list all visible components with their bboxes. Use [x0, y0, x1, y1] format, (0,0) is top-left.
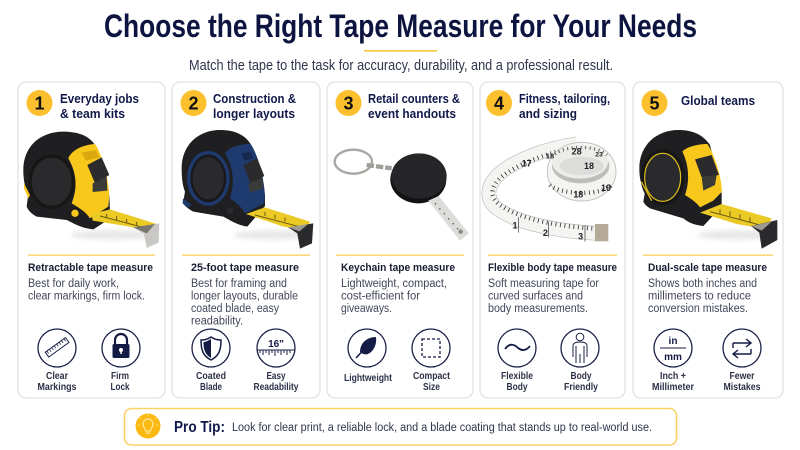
step badge 3 — [336, 90, 362, 116]
pro tip text: Look for clear print, a reliable lock, and a blade coating that stands up to real-world use. — [232, 422, 652, 434]
icon: retractable tape measure — [23, 132, 159, 248]
type name: Flexible body tape measure — [488, 262, 617, 274]
label — [254, 371, 299, 393]
heading: longer layouts — [213, 106, 295, 121]
icon: fewer mistakes arrows — [723, 329, 761, 367]
label — [501, 371, 533, 393]
icon: inch and millimeter: in — [669, 336, 677, 347]
label: Size — [423, 382, 440, 393]
heading: & team kits — [60, 106, 125, 121]
label — [652, 371, 694, 393]
label: Easy — [266, 371, 286, 382]
heading: event handouts — [368, 106, 456, 121]
label — [38, 371, 77, 393]
type name: 25-foot tape measure — [191, 262, 299, 274]
description: Lightweight, compact, — [341, 278, 447, 290]
label: Coated — [196, 371, 226, 382]
icon: flexible body tape: 1 — [512, 221, 517, 231]
subtitle: Match the tape to the task for accuracy, durability, and a professional result. — [189, 58, 613, 74]
description: readability. — [191, 316, 243, 328]
pro tip label: Pro Tip: — [174, 419, 225, 436]
label — [724, 371, 761, 393]
label: Lock — [110, 382, 130, 393]
heading: Everyday jobs — [60, 91, 139, 106]
icon: 25-foot tape measure — [182, 130, 313, 249]
label — [196, 371, 226, 393]
icon: flexible body tape: 19 — [601, 183, 611, 193]
description: millimeters to reduce — [648, 290, 751, 302]
description: Soft measuring tape for — [488, 278, 599, 290]
icon: inch and millimeter — [654, 329, 692, 367]
label: Compact — [413, 371, 451, 382]
heading — [519, 91, 610, 121]
label: Lightweight — [344, 373, 393, 384]
label — [413, 371, 451, 393]
description: Shows both inches and — [648, 278, 757, 290]
icon: flexible body tape: 28 — [572, 147, 582, 157]
label: Readability — [254, 382, 299, 393]
step badge 1 — [26, 90, 52, 116]
step badge 4 — [486, 90, 512, 116]
icon: coated blade — [192, 329, 230, 367]
icon: flexible body tape: 2 — [543, 228, 548, 238]
heading: Retail counters & — [368, 91, 460, 106]
icon: flexible body tape — [489, 142, 616, 242]
step badge 3: 3 — [343, 94, 354, 114]
icon: body friendly person — [561, 329, 599, 367]
label: Body — [570, 371, 592, 382]
icon: light bulb — [136, 414, 160, 438]
heading: Global teams — [681, 93, 755, 108]
panel: retail counters — [327, 82, 473, 398]
icon: flexible body tape: 18 — [546, 152, 554, 161]
panel: global teams — [633, 82, 783, 398]
label: Mistakes — [724, 382, 761, 393]
panel: fitness tailoring — [480, 82, 625, 398]
description — [488, 278, 599, 315]
heading: Construction & — [213, 91, 296, 106]
description: cost-efficient for — [341, 290, 420, 302]
icon: compact size — [412, 329, 450, 367]
icon: easy readability — [257, 329, 295, 367]
panel: construction — [172, 82, 320, 398]
step badge 2 — [180, 90, 206, 116]
description: Best for framing and — [191, 278, 287, 290]
icon: flexible body tape: 3 — [578, 231, 583, 241]
label: Fewer — [730, 371, 755, 382]
icon: easy readability: 16" — [268, 339, 284, 350]
icon: lightweight feather — [348, 329, 386, 367]
icon: firm lock — [102, 329, 140, 367]
icon: flexible body wave — [498, 329, 536, 367]
label: Flexible — [501, 371, 533, 382]
heading — [60, 91, 139, 121]
description — [191, 278, 298, 328]
icon: dual-scale tape measure — [639, 130, 777, 249]
heading: and sizing — [519, 106, 577, 121]
description: coated blade, easy — [191, 303, 279, 315]
label: Blade — [200, 382, 222, 393]
icon: clear markings — [38, 329, 76, 367]
label — [564, 371, 598, 393]
icon: flexible body tape: 17 — [522, 159, 532, 169]
step badge 2: 2 — [188, 94, 199, 114]
heading — [213, 91, 296, 121]
label — [110, 371, 130, 393]
callout: pro tip — [124, 408, 676, 445]
icon: flexible body tape: 18 — [573, 190, 583, 200]
label: Markings — [38, 382, 77, 393]
label: Millimeter — [652, 382, 694, 393]
description: Best for daily work, — [28, 278, 119, 290]
step badge 1: 1 — [34, 94, 45, 114]
label: Clear — [46, 371, 68, 382]
icon: inch and millimeter: mm — [664, 352, 682, 363]
description — [648, 278, 757, 315]
heading — [368, 91, 460, 121]
description: giveaways. — [341, 303, 392, 315]
title underline — [364, 50, 437, 52]
type name: Dual-scale tape measure — [648, 262, 767, 274]
step badge 4: 4 — [494, 94, 504, 114]
label: Friendly — [564, 382, 598, 393]
description — [341, 278, 447, 315]
label: Body — [506, 382, 528, 393]
description: conversion mistakes. — [648, 303, 748, 315]
label: Firm — [111, 371, 129, 382]
heading: Fitness, tailoring, — [519, 91, 610, 106]
icon: flexible body tape: 18 — [584, 161, 594, 171]
step badge 5: 5 — [649, 94, 660, 114]
label: Inch + — [660, 371, 686, 382]
step badge 5 — [642, 90, 668, 116]
panel: everyday jobs — [18, 82, 165, 398]
description: body measurements. — [488, 303, 588, 315]
icon: flexible body tape: 23 — [595, 152, 603, 159]
description — [28, 278, 145, 302]
description: curved surfaces and — [488, 290, 583, 302]
description: clear markings, firm lock. — [28, 290, 145, 302]
description: longer layouts, durable — [191, 290, 298, 302]
type name: Retractable tape measure — [28, 262, 153, 274]
type name: Keychain tape measure — [341, 262, 455, 274]
icon: keychain tape measure — [335, 150, 469, 241]
